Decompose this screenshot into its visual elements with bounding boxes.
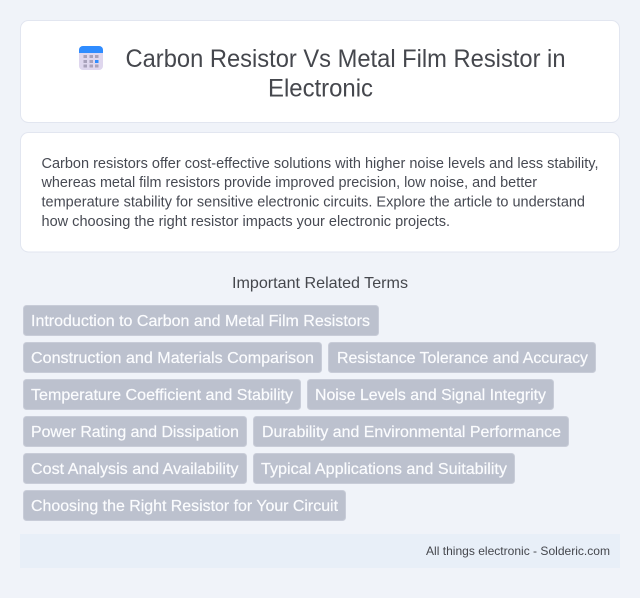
tag [254, 454, 514, 484]
title: Electronic [268, 74, 373, 102]
tag [254, 416, 568, 446]
tag [24, 416, 246, 446]
footer [20, 534, 620, 568]
tag [308, 380, 554, 410]
tag: Choosing the Right Resistor for Your Circuit [31, 498, 339, 515]
icon: calendar [79, 46, 103, 70]
tag [24, 490, 346, 520]
tag [24, 306, 378, 336]
tag: Temperature Coefficient and Stability [31, 387, 293, 404]
panel: summary [20, 132, 620, 252]
tag [24, 454, 246, 484]
title: Carbon Resistor Vs Metal Film Resistor in [126, 45, 566, 73]
tag: Power Rating and Dissipation [31, 424, 239, 441]
tag [328, 342, 596, 372]
summary text: temperature stability for sensitive electronic circuits. Explore the article to understand [42, 194, 585, 210]
panel: title card [20, 20, 620, 122]
summary text: whereas metal film resistors provide improved precision, low noise, and better [40, 175, 537, 191]
tag: Durability and Environmental Performance [262, 424, 561, 441]
summary text [40, 156, 598, 230]
tag: Cost Analysis and Availability [31, 461, 238, 478]
tag [24, 342, 322, 372]
panel: related terms tags [24, 306, 596, 520]
tag [24, 380, 300, 410]
heading: important related terms: Important Related Terms [232, 275, 408, 292]
tag: Noise Levels and Signal Integrity [315, 387, 546, 404]
tag: Construction and Materials Comparison [31, 350, 314, 367]
title [126, 45, 566, 102]
summary text: Carbon resistors offer cost-effective solutions with higher noise levels and less stability, [42, 156, 598, 172]
tag: Typical Applications and Suitability [261, 461, 507, 478]
summary text: how choosing the right resistor impacts your electronic projects. [42, 214, 450, 230]
tag: Resistance Tolerance and Accuracy [337, 350, 588, 367]
footer: All things electronic - Solderic.com [426, 544, 610, 558]
tag: Introduction to Carbon and Metal Film Resistors [31, 313, 370, 330]
